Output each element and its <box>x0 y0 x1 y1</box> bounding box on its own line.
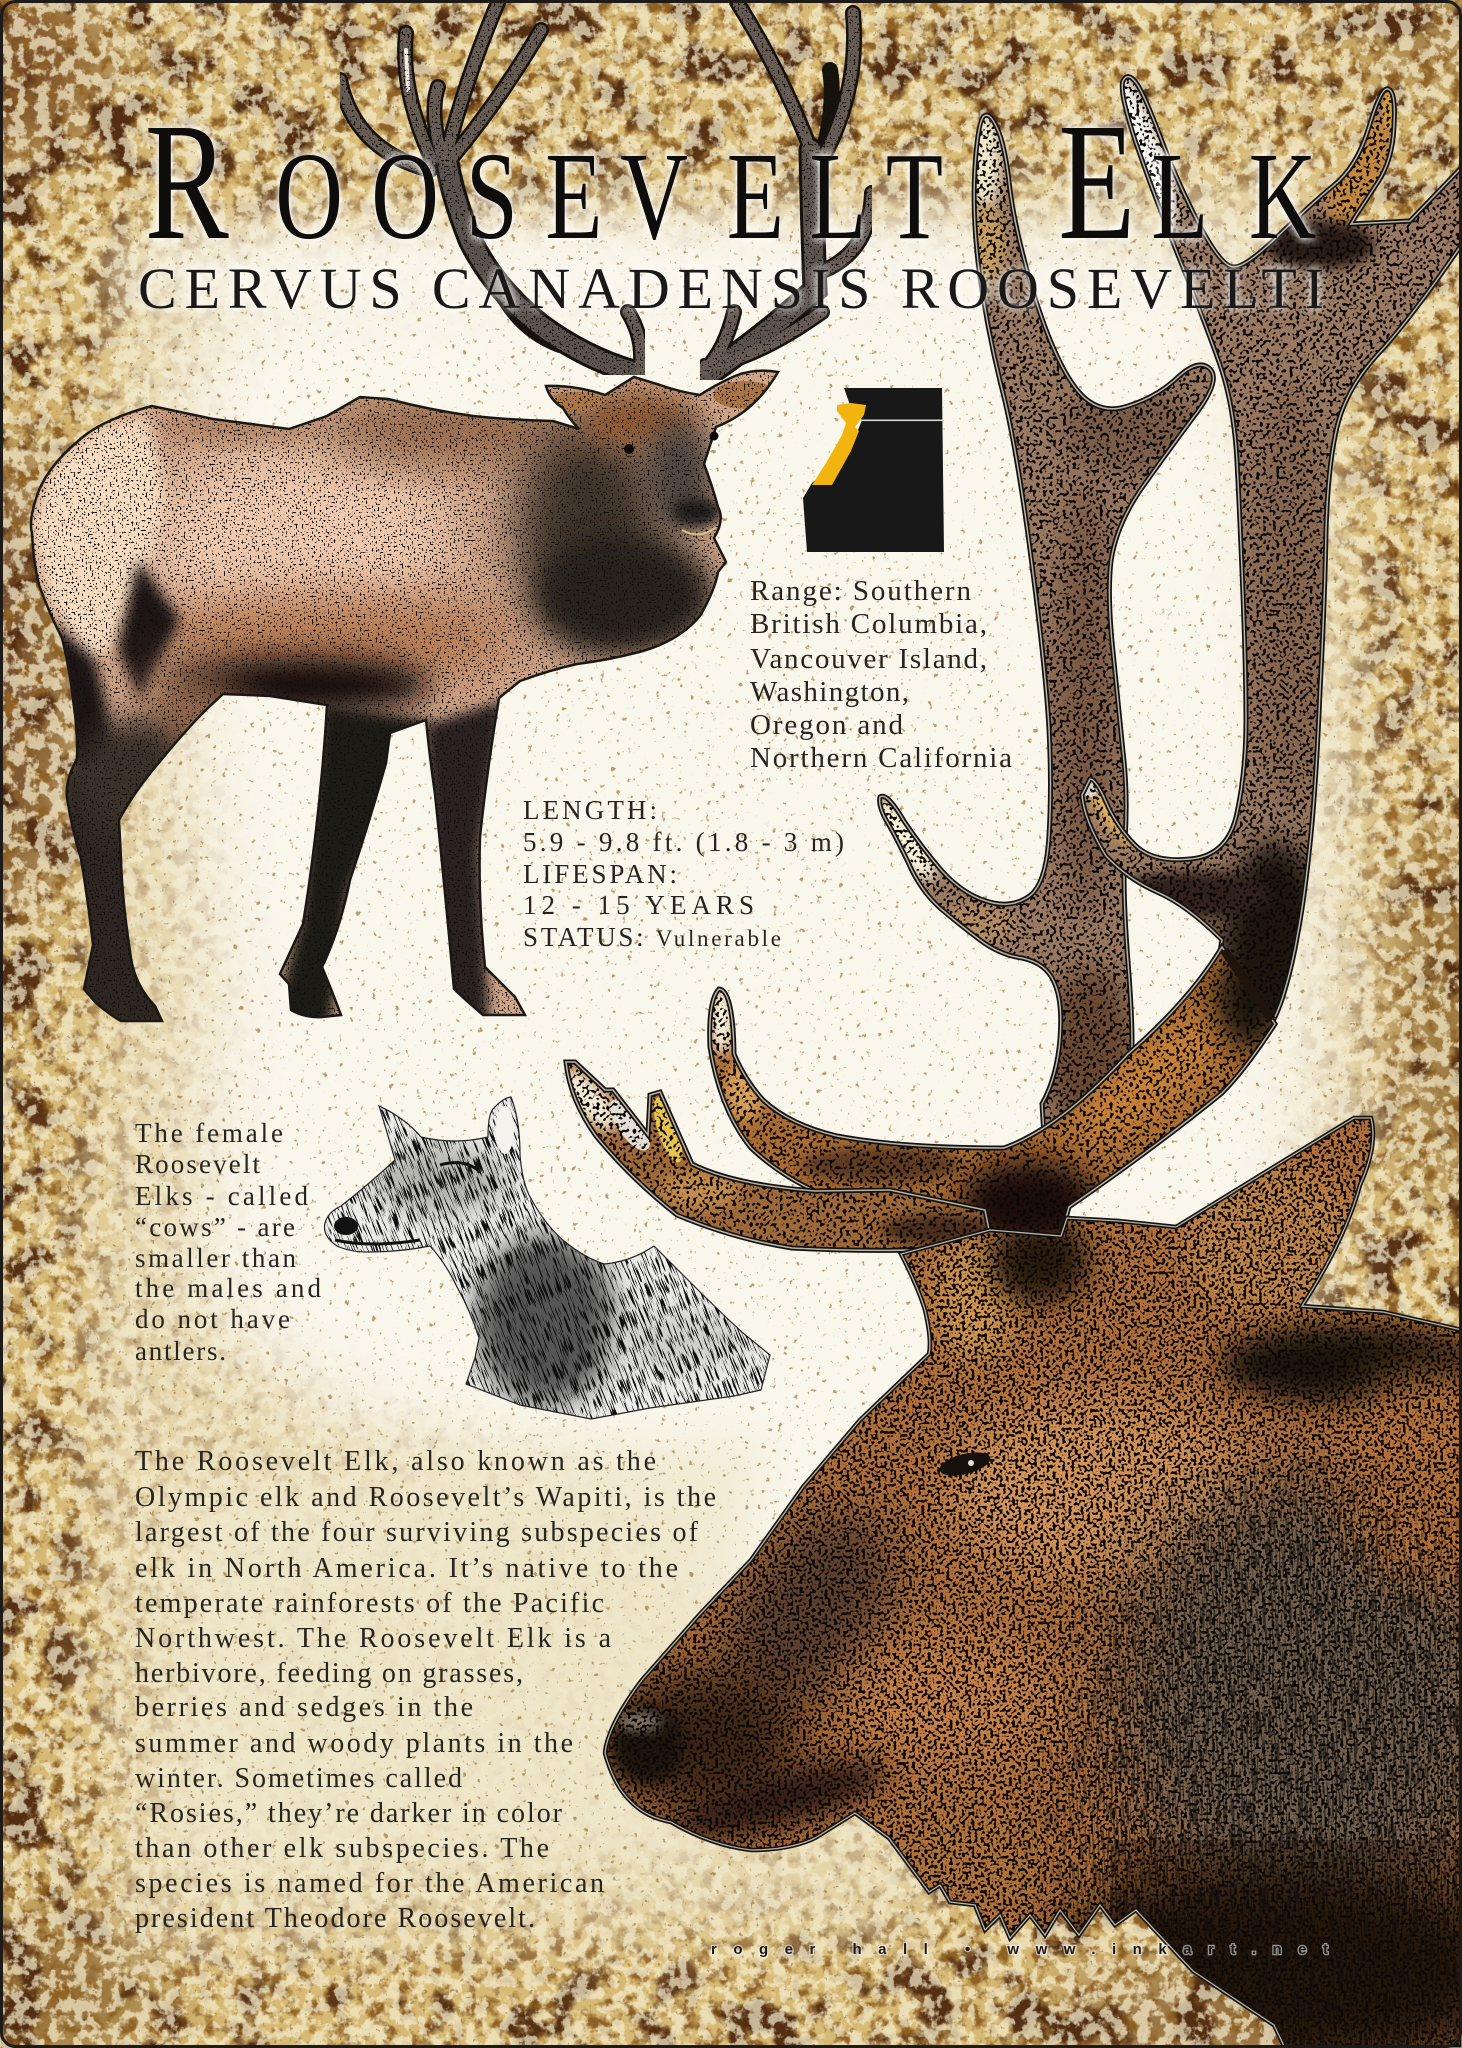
cow elk sketch <box>190 894 905 1663</box>
main description text <box>135 1446 716 1934</box>
main description text: “Rosies,” they’re darker in color <box>135 1798 563 1829</box>
main description text: species is named for the American <box>135 1868 604 1899</box>
stats text: LIFESPAN: <box>523 859 677 889</box>
right small antler of standing elk <box>700 2 872 380</box>
stats text: 5.9 - 9.8 ft. (1.8 - 3 m) <box>523 827 844 857</box>
main description text: herbivore, feeding on grasses, <box>135 1658 523 1689</box>
eye <box>937 1448 993 1480</box>
female elk note: Roosevelt <box>135 1149 260 1179</box>
range text: Oregon and <box>750 709 904 741</box>
stats text: 12 - 15 YEARS <box>523 890 754 920</box>
title: E <box>1058 90 1135 275</box>
credit line: roger hall • www.inkart.net <box>711 1941 1328 1958</box>
main description text: The Roosevelt Elk, also known as the <box>135 1446 656 1477</box>
range text <box>750 575 1012 774</box>
range text: Vancouver Island, <box>750 643 987 675</box>
title: OOSEVELT <box>275 127 943 265</box>
title <box>145 90 1316 275</box>
main description text: largest of the four surviving subspecies of <box>135 1517 699 1548</box>
eyes and nose <box>624 432 718 534</box>
main description text: winter. Sometimes called <box>135 1763 462 1794</box>
main description text: summer and woody plants in the <box>135 1728 573 1759</box>
stats text: STATUS: Vulnerable <box>523 922 781 952</box>
map: white border line <box>862 420 944 421</box>
main description text: Northwest. The Roosevelt Elk is a <box>135 1623 612 1654</box>
female elk note <box>135 1118 322 1366</box>
title: LK <box>1151 127 1316 265</box>
left small antler of standing elk <box>340 0 645 375</box>
big antler: brow tines <box>553 1061 1000 1250</box>
main description text: elk in North America. It’s native to the <box>135 1553 678 1584</box>
range text: Northern California <box>750 742 1012 774</box>
main description text: than other elk subspecies. The <box>135 1833 549 1864</box>
female elk note: Elks - called <box>135 1181 308 1211</box>
main description text: berries and sedges in the <box>135 1692 473 1723</box>
title: R <box>145 90 229 275</box>
range text: British Columbia, <box>750 608 987 640</box>
ear <box>1180 1165 1360 1315</box>
main description text: temperate rainforests of the Pacific <box>135 1588 604 1619</box>
female elk note: “cows” - are <box>135 1212 295 1242</box>
female elk note: smaller than <box>135 1243 296 1273</box>
large elk head portrait <box>600 1118 1462 2048</box>
standing bull elk <box>31 371 778 1030</box>
female elk note: The female <box>135 1118 283 1148</box>
big antler: left vertical beam <box>864 110 1213 1136</box>
map: yellow range <box>812 403 866 485</box>
female elk note: the males and <box>135 1273 322 1303</box>
subtitle: CERVUS CANADENSIS ROOSEVELTI <box>138 256 1324 321</box>
big antler: main lower beam <box>710 947 1284 1250</box>
range text: Range: Southern <box>750 575 972 607</box>
range map <box>803 388 944 552</box>
range text: Washington, <box>750 676 909 708</box>
stats text <box>523 795 844 952</box>
female elk note: do not have <box>135 1304 290 1334</box>
big antler: right beam <box>1081 63 1462 1080</box>
female elk note: antlers. <box>135 1336 226 1366</box>
main description text: president Theodore Roosevelt. <box>135 1903 535 1934</box>
main description text: Olympic elk and Roosevelt’s Wapiti, is the <box>135 1482 716 1513</box>
map: black land block <box>803 388 944 552</box>
stats text: LENGTH: <box>523 795 657 825</box>
